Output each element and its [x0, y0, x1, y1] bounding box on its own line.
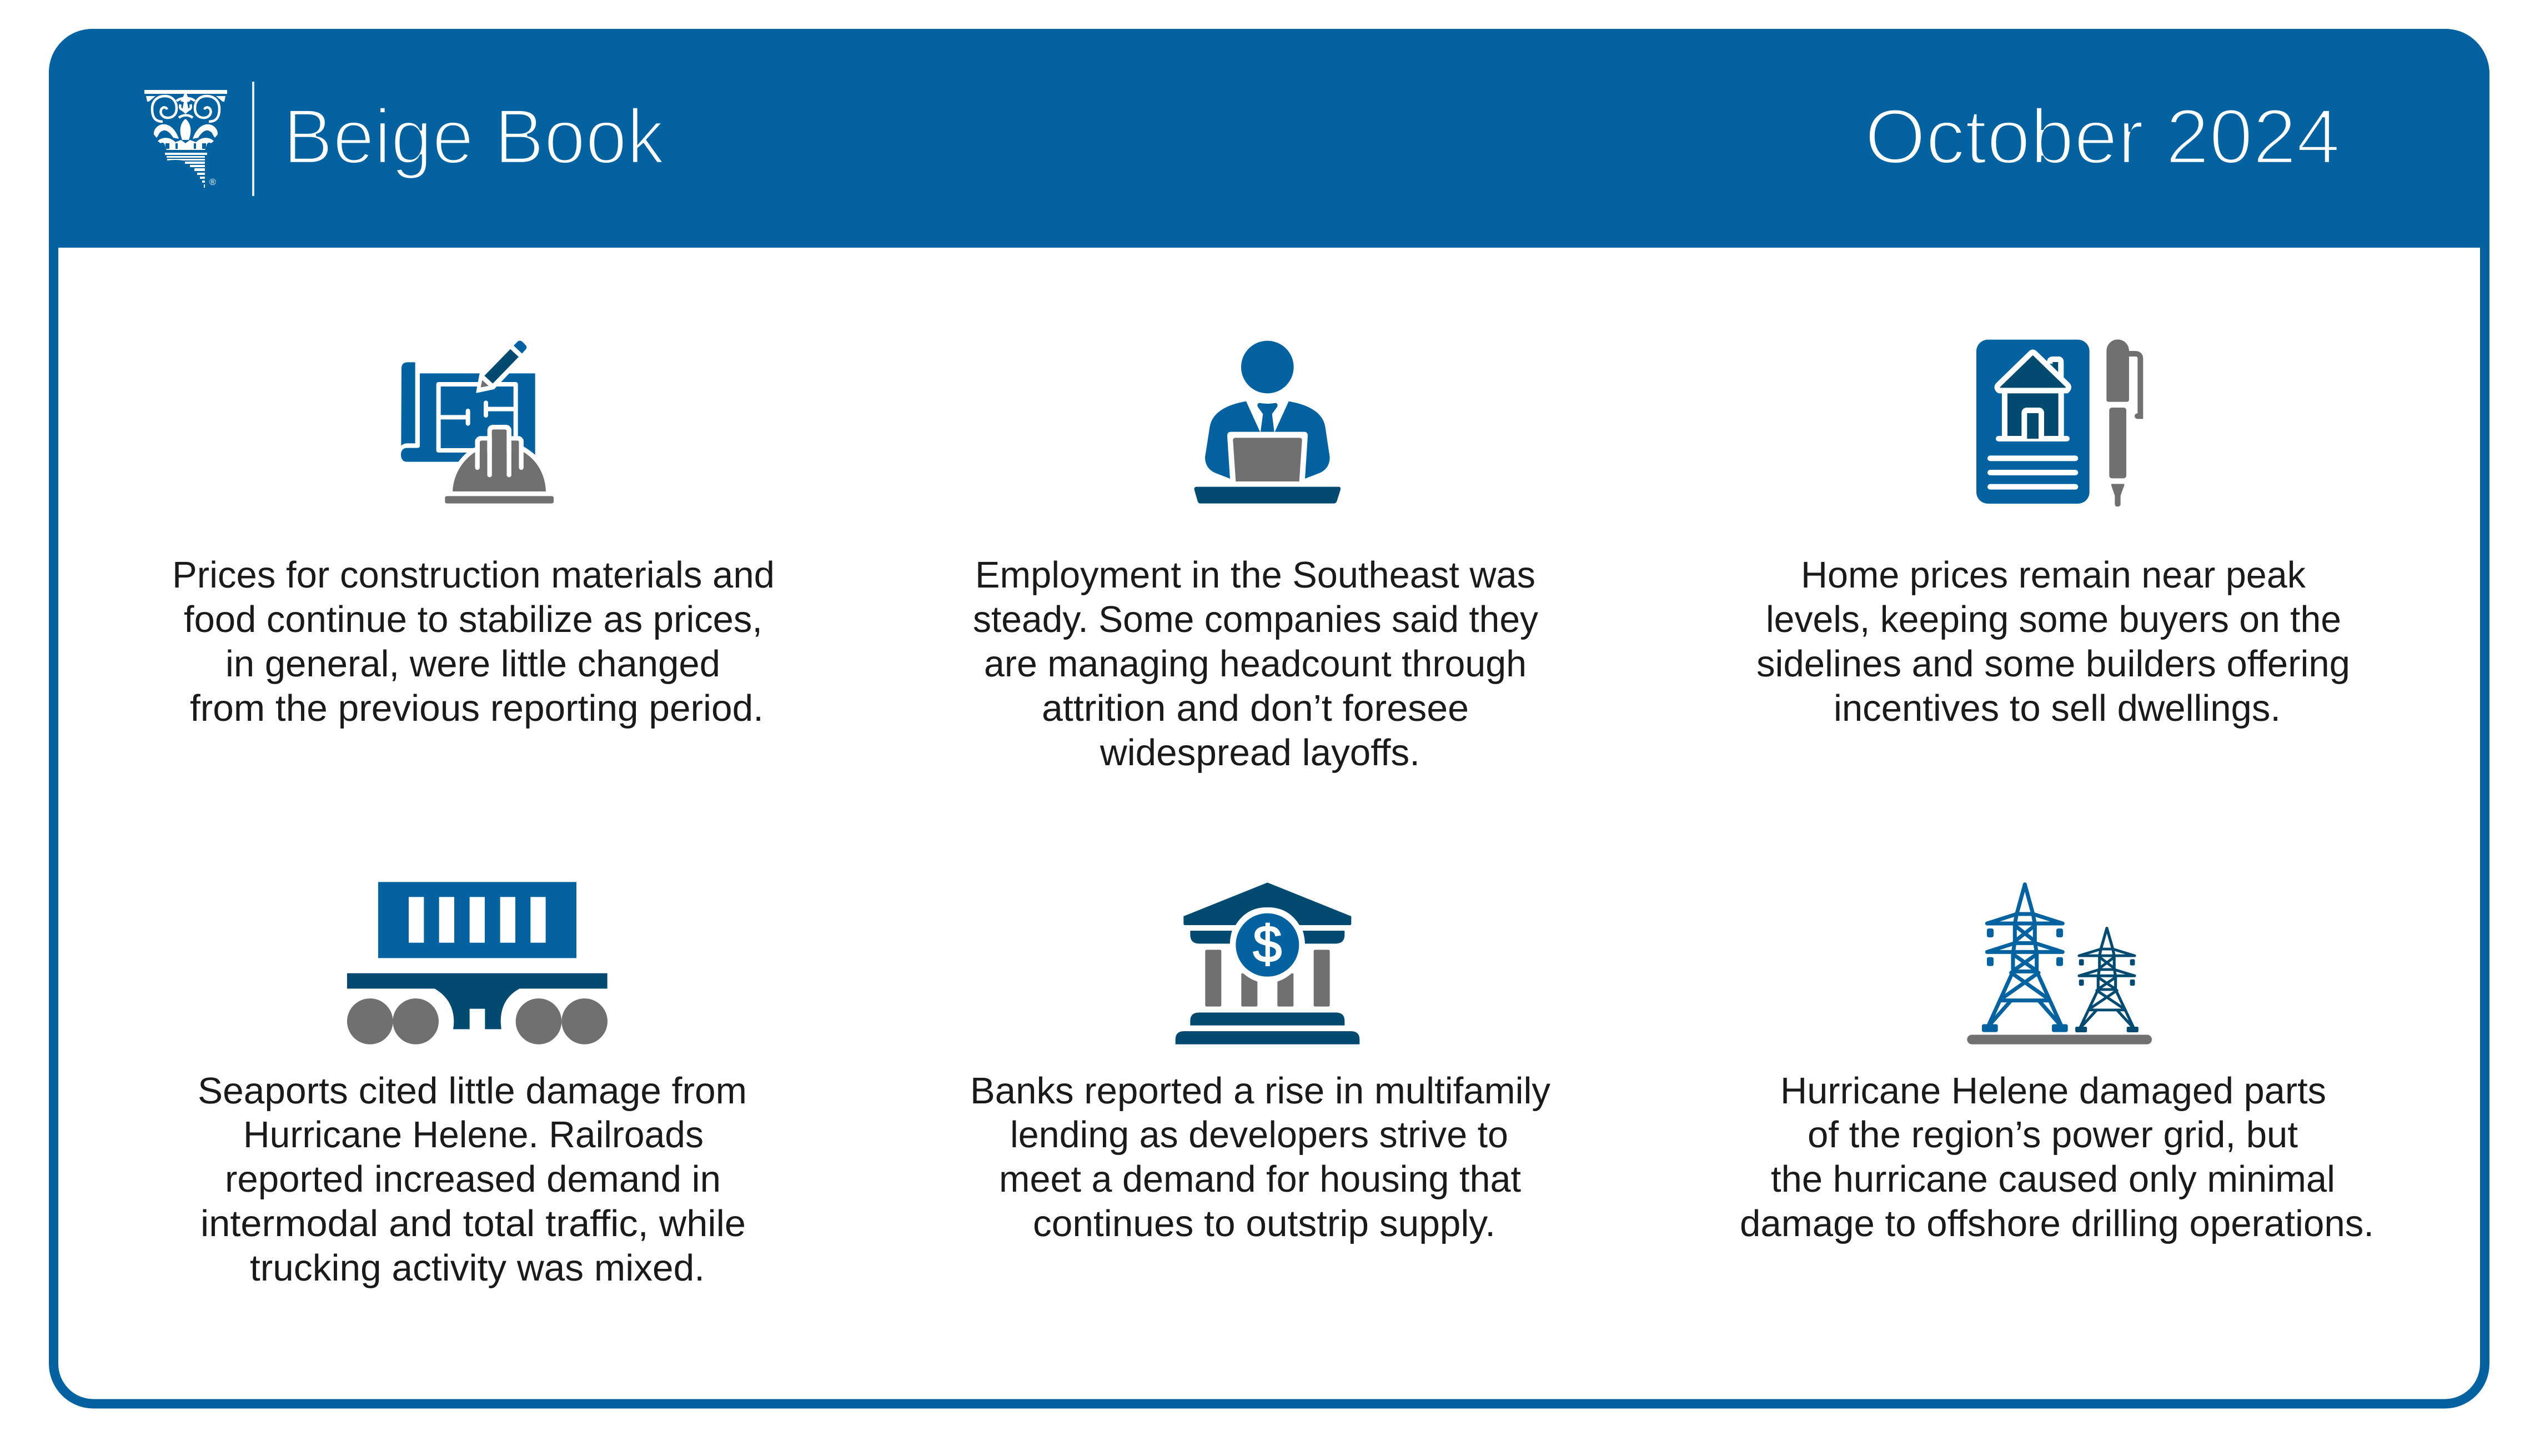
panel: home prices — [1756, 339, 2350, 729]
text: home prices: sidelines and some builders offering — [1756, 643, 2350, 685]
text: energy: of the region’s power grid, but — [1808, 1114, 2298, 1156]
text: energy: damage to offshore drilling operations. — [1740, 1203, 2374, 1244]
text: prices: Prices for construction materials and — [172, 554, 775, 596]
text: energy: Hurricane Helene damaged parts — [1780, 1070, 2326, 1112]
text: employment: steady. Some companies said they — [973, 599, 1538, 640]
icon: electricity pylons — [1967, 885, 2152, 1045]
panel: energy — [1740, 885, 2374, 1244]
icon: blueprint, pencil and hard hat — [401, 340, 559, 507]
text: transportation: Hurricane Helene. Railroads — [243, 1114, 704, 1156]
header band — [49, 29, 2489, 248]
text: banking: Banks reported a rise in multifamily — [970, 1070, 1550, 1112]
text: energy: the hurricane caused only minimal — [1771, 1158, 2335, 1200]
text: employment — [973, 554, 1538, 774]
text: banking: lending as developers strive to — [1010, 1114, 1508, 1156]
text: prices: in general, were little changed — [225, 643, 720, 685]
icon: house listing document and pen — [1976, 339, 2140, 506]
text: transportation: trucking activity was mixed. — [250, 1247, 705, 1289]
text: transportation: Seaports cited little damage from — [198, 1070, 747, 1112]
panel: transportation — [198, 882, 747, 1289]
text: banking — [970, 1070, 1550, 1244]
text: prices: from the previous reporting period. — [190, 687, 764, 729]
date: October 2024: October 2024 — [1865, 93, 2340, 180]
text: banking: continues to outstrip supply. — [1033, 1203, 1495, 1244]
logo: Corinthian column — [144, 90, 227, 188]
logo: Corinthian column: ® — [209, 178, 216, 187]
text: prices: food continue to stabilize as prices, — [184, 599, 762, 640]
text: home prices: incentives to sell dwellings. — [1834, 687, 2281, 729]
text: energy — [1740, 1070, 2374, 1244]
text: transportation — [198, 1070, 747, 1289]
logo divider — [252, 82, 254, 196]
text: transportation: reported increased demand in — [225, 1158, 721, 1200]
text: transportation: intermodal and total traffic, while — [200, 1203, 746, 1244]
icon: rail freight container — [347, 882, 608, 1045]
icon: bank with dollar coin — [1176, 882, 1359, 1045]
text: employment: are managing headcount through — [984, 643, 1527, 685]
text: home prices — [1756, 554, 2350, 729]
text: home prices: levels, keeping some buyers on the — [1766, 599, 2341, 640]
text: banking: meet a demand for housing that — [999, 1158, 1521, 1200]
title: Beige Book: Beige Book — [283, 93, 665, 180]
icon: bank with dollar coin: $ — [1253, 915, 1282, 973]
text: employment: Employment in the Southeast was — [975, 554, 1535, 596]
text: home prices: Home prices remain near peak — [1801, 554, 2306, 596]
panel: employment — [973, 341, 1538, 774]
text: employment: attrition and don’t foresee — [1042, 687, 1469, 729]
text: prices — [172, 554, 775, 729]
icon: office worker at laptop — [1194, 341, 1341, 504]
panel: banking — [970, 882, 1550, 1244]
panel: prices — [172, 340, 775, 729]
text: employment: widespread layoffs. — [1100, 732, 1420, 774]
